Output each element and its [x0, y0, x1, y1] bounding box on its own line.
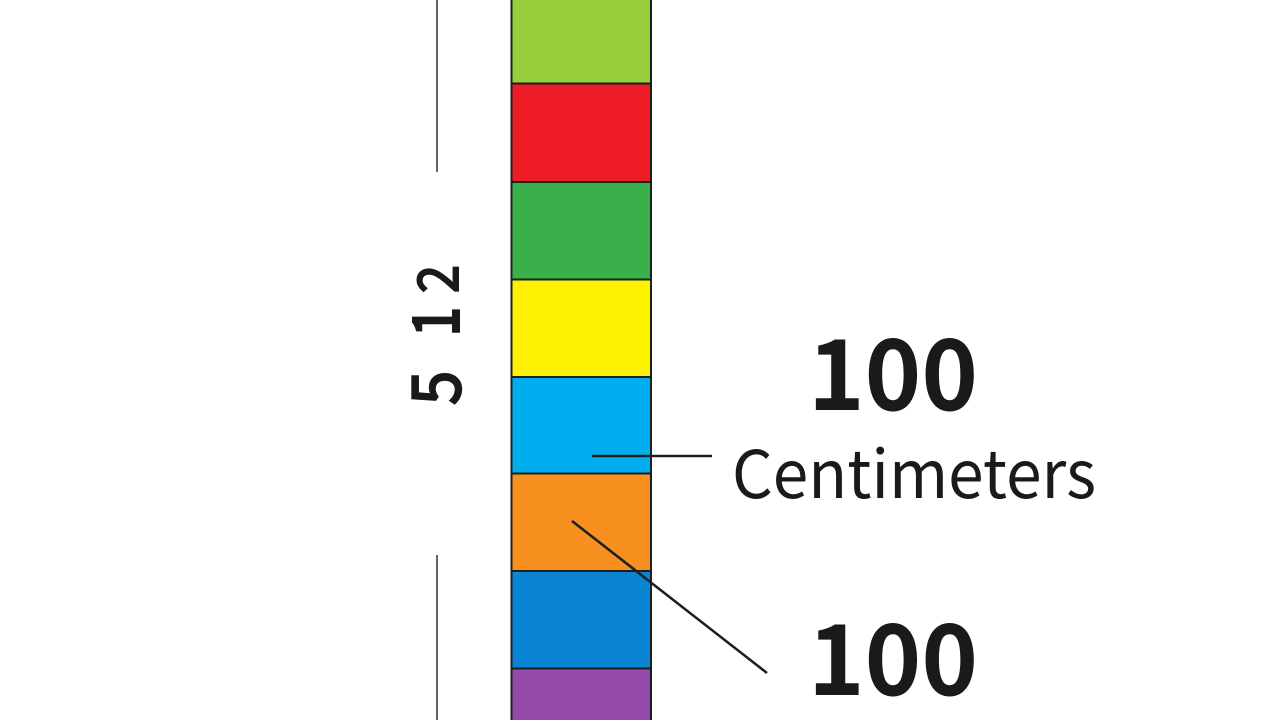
unit label: Centimeters: [732, 422, 1096, 518]
rotated scale label: 5: [384, 371, 480, 405]
upper value: 100: [808, 297, 978, 439]
lower dimension line: [436, 555, 438, 720]
rotated scale label: 1: [385, 306, 480, 337]
leader line to Centimeters: [592, 455, 712, 457]
upper dimension line: [436, 0, 438, 172]
leader line to lower value: [572, 521, 767, 673]
rotated scale label: [384, 265, 480, 405]
lower value: 100: [808, 582, 978, 720]
rotated scale label: 2: [394, 265, 475, 293]
colour segment stack: [512, 0, 651, 720]
